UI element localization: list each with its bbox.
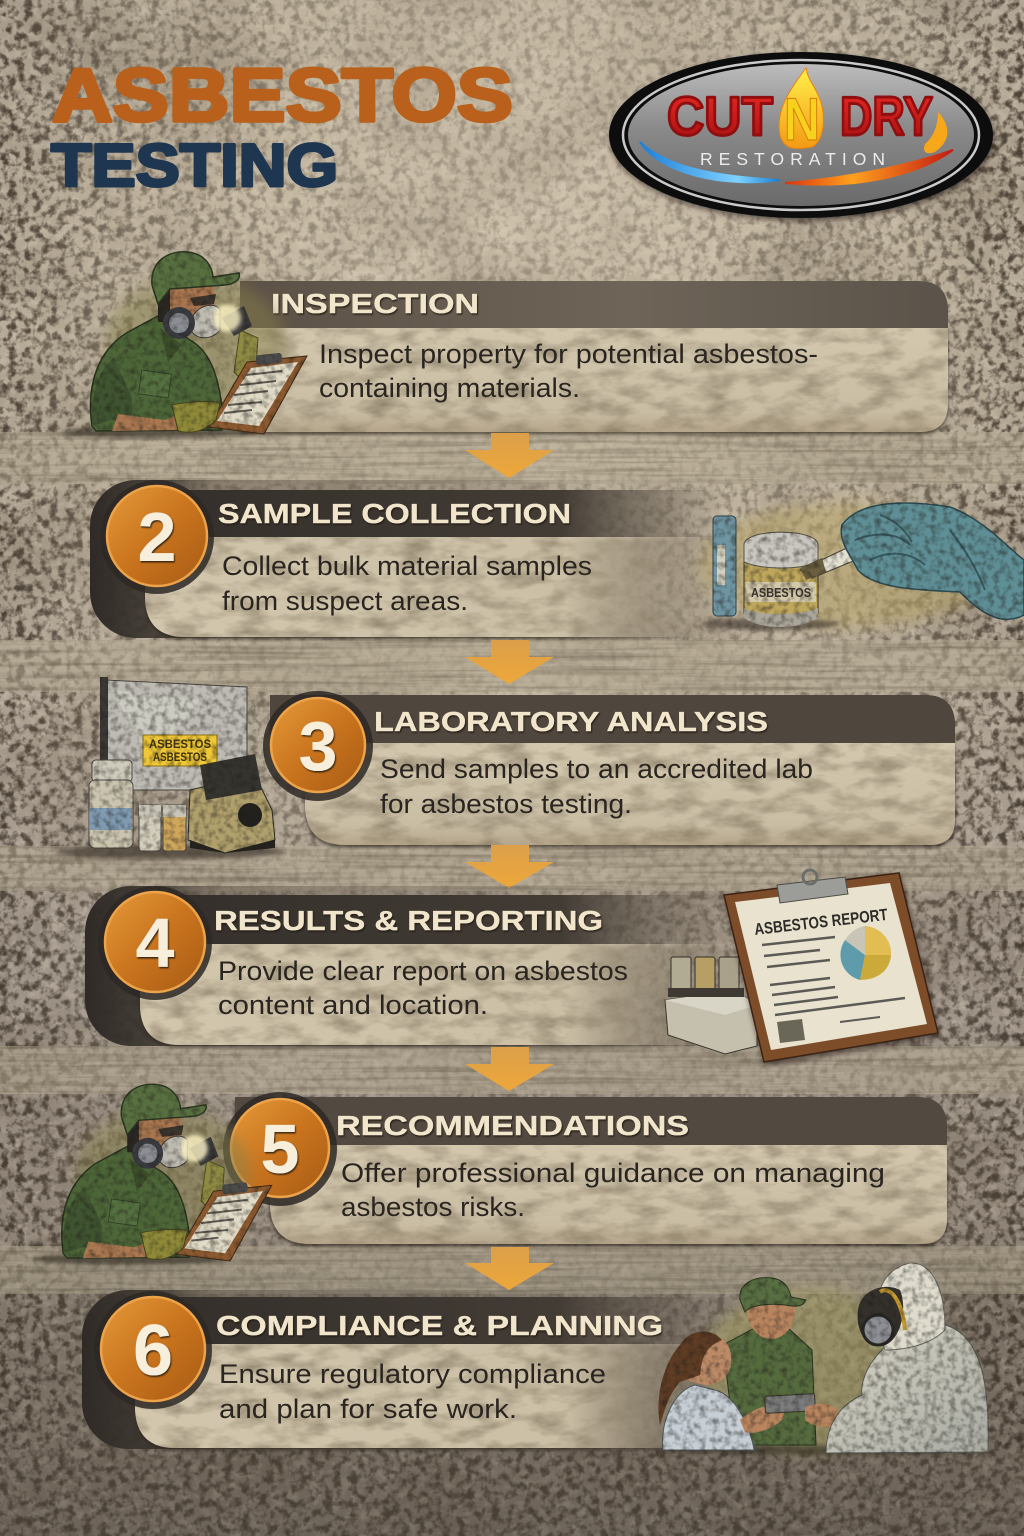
body text	[380, 754, 813, 819]
arrow 4	[465, 1047, 554, 1091]
panel body	[270, 1145, 947, 1244]
body text: Offer professional guidance on managing	[341, 1158, 885, 1188]
icon: client, inspector and suited technician	[650, 1263, 990, 1455]
panel body	[140, 944, 735, 1045]
icon: gloved hand with sample jar: ASBESTOS	[751, 586, 811, 600]
icon: asbestos report clipboard and sample jars	[665, 870, 938, 1062]
heading: SAMPLE COLLECTION	[218, 498, 571, 529]
logo: Cut N Dry Restoration: DRY	[840, 85, 933, 147]
heading: RECOMMENDATIONS	[336, 1110, 689, 1141]
panel body	[145, 537, 730, 637]
logo: Cut N Dry Restoration: RESTORATION	[700, 149, 885, 169]
header band	[240, 281, 948, 328]
body text	[341, 1158, 885, 1222]
body text: from suspect areas.	[222, 586, 468, 616]
step number badge: 2	[138, 498, 176, 576]
step number badge: 5	[261, 1110, 299, 1188]
body text: Inspect property for potential asbestos-	[319, 339, 818, 369]
dark backing	[82, 1290, 732, 1449]
header band	[125, 1297, 725, 1344]
body text	[219, 1359, 606, 1424]
panel body	[240, 328, 948, 432]
icon: lab bag, bottles and instrument	[55, 677, 285, 859]
icon: lab bag, bottles and instrument: ASBESTOS	[153, 752, 207, 764]
body text: containing materials.	[319, 373, 580, 403]
body text	[218, 956, 628, 1020]
header band	[130, 490, 730, 537]
step number badge: 4	[136, 904, 175, 982]
heading: LABORATORY ANALYSIS	[374, 706, 768, 737]
logo: Cut N Dry Restoration: N	[784, 86, 820, 153]
step number badge	[94, 1291, 212, 1409]
panel: step 1 inspection	[240, 281, 948, 432]
panel: step 2 sample collection	[90, 480, 730, 638]
panel: step 3 laboratory analysis	[263, 691, 955, 845]
panel body	[305, 743, 955, 845]
body text: asbestos risks.	[341, 1192, 525, 1222]
body text: for asbestos testing.	[380, 789, 632, 819]
heading: INSPECTION	[271, 288, 479, 319]
title: Asbestos Testing	[51, 53, 513, 199]
panel body	[135, 1344, 735, 1448]
arrow 2	[465, 640, 554, 684]
icon: lab bag, bottles and instrument: ASBESTOS	[149, 739, 211, 751]
panel: step 6 compliance and planning	[82, 1290, 735, 1449]
heading: RESULTS & REPORTING	[214, 905, 603, 936]
header band	[270, 695, 955, 743]
step number badge	[263, 691, 373, 801]
body text: Provide clear report on asbestos	[218, 956, 628, 986]
body text: and plan for safe work.	[219, 1394, 517, 1424]
arrow 1	[465, 433, 554, 478]
icon: inspector with flashlight	[32, 1084, 272, 1265]
icon: asbestos report clipboard and sample jars: ASBESTOS REPORT	[753, 906, 889, 939]
body text: Ensure regulatory compliance	[219, 1359, 606, 1389]
heading: COMPLIANCE & PLANNING	[216, 1310, 663, 1341]
dark backing	[90, 480, 730, 638]
step number badge	[223, 1092, 337, 1206]
logo: Cut N Dry Restoration: CUT	[667, 85, 773, 147]
body text	[222, 551, 592, 616]
logo: Cut N Dry Restoration	[609, 52, 993, 218]
title: Asbestos Testing: TESTING	[51, 132, 338, 199]
header band	[235, 1097, 947, 1145]
body text: Collect bulk material samples	[222, 551, 592, 581]
title: Asbestos Testing: ASBESTOS	[52, 53, 513, 137]
body text: Send samples to an accredited lab	[380, 754, 813, 784]
panel: step 4 results and reporting	[85, 886, 735, 1046]
icon: gloved hand with sample jar	[700, 503, 1024, 630]
body text: content and location.	[218, 990, 488, 1020]
step number badge	[100, 480, 214, 594]
dark backing	[85, 886, 735, 1046]
arrow 5	[465, 1247, 554, 1290]
step number badge: 6	[133, 1311, 173, 1391]
body text	[319, 339, 818, 403]
arrow 3	[465, 845, 554, 888]
icon: inspector with clipboard	[60, 252, 307, 438]
panel: step 5 recommendations	[223, 1092, 947, 1244]
step number badge	[98, 886, 212, 1000]
header band	[130, 895, 730, 944]
step number badge: 3	[299, 707, 337, 785]
